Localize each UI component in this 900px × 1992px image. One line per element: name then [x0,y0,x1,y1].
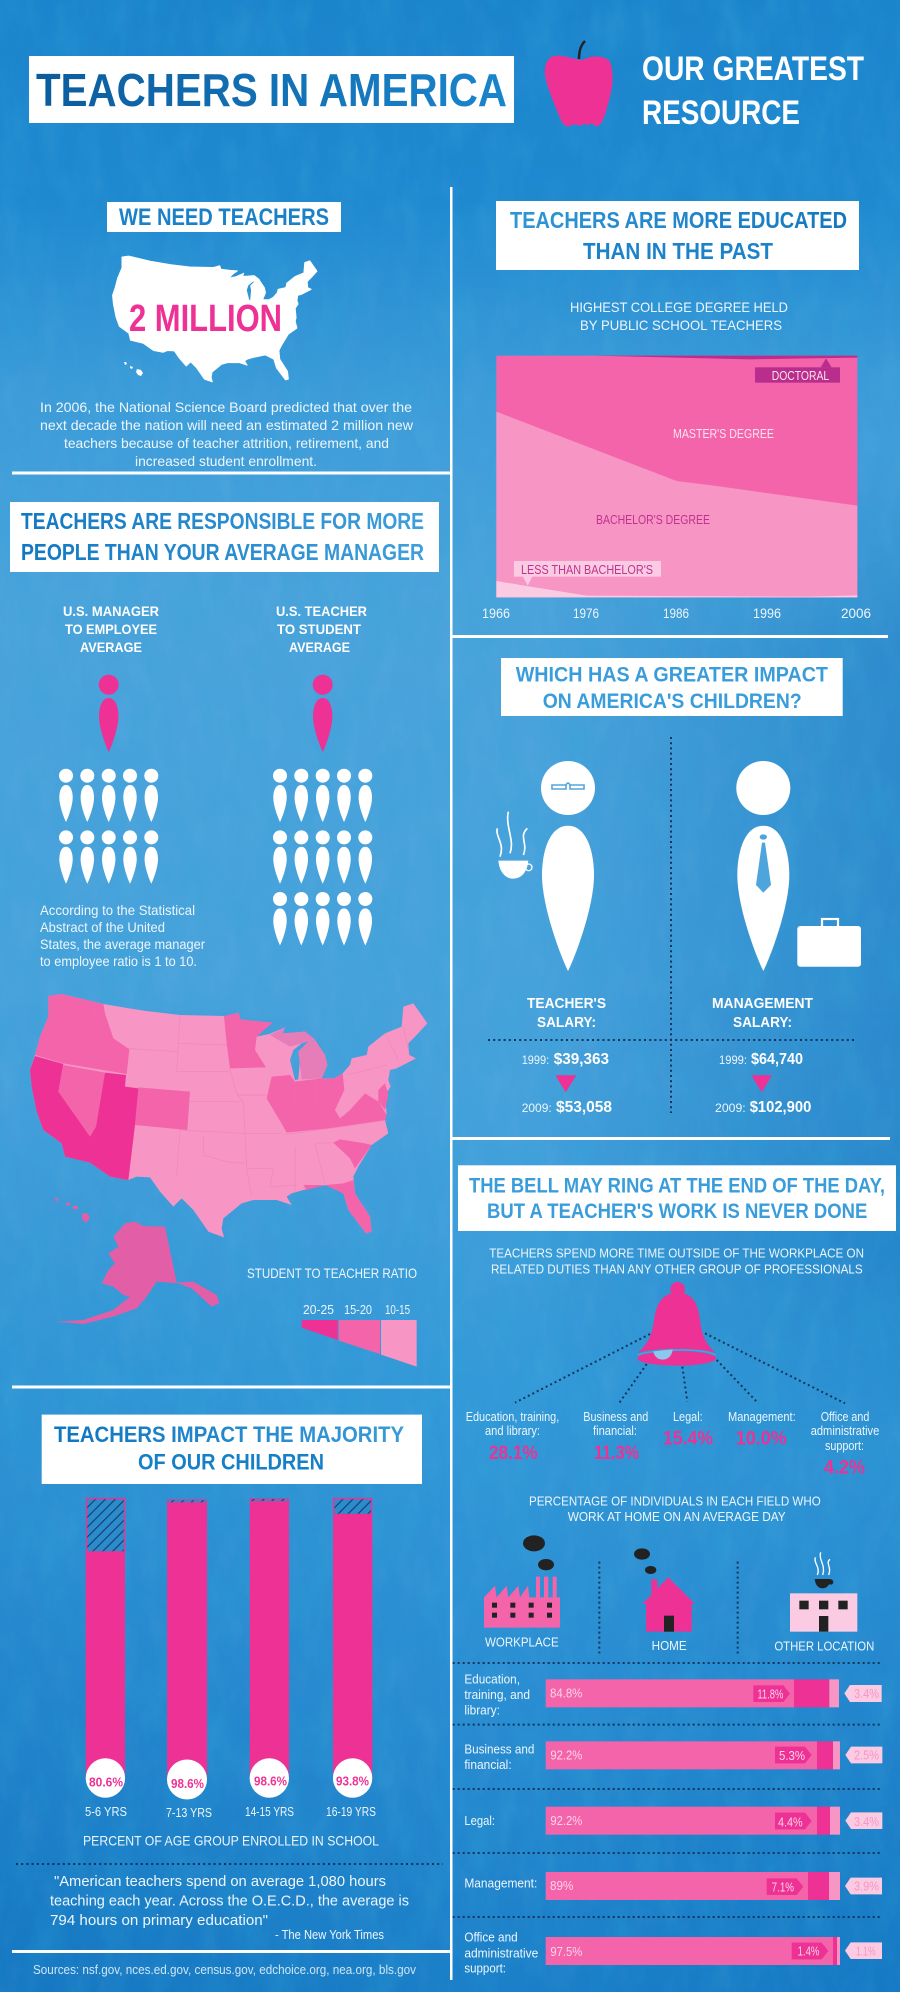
row: management [464,1872,882,1900]
text block: States, the average manager [40,936,205,952]
intro text: TEACHERS SPEND MORE TIME OUTSIDE OF THE WORKPLACE ON [489,1245,864,1260]
heading: TEACHERS IMPACT THE MAJORITY [54,1422,404,1447]
stat: office: support: [825,1438,864,1453]
row: education: library: [464,1702,500,1717]
icon: manager figure with tie [736,761,790,971]
panel: teachers impact the majority [16,1415,443,1977]
hawaii [55,1198,90,1223]
text block [40,399,414,469]
row: legal [464,1807,882,1835]
heading: OF OUR CHILDREN [138,1450,324,1474]
row: education: 3.4% [854,1686,879,1701]
icon: white US map with 2 million: 2 MILLION [129,298,282,340]
stat: management: Management: [728,1409,796,1424]
area chart: college degree: 2006 [841,605,871,621]
row: business: 2.5% [854,1748,879,1763]
subtitle [642,50,864,132]
label: manager [63,603,159,655]
label: manager: AVERAGE [80,639,142,655]
row: legal: 3.4% [854,1814,879,1829]
bar: 7-13 yrs: 7-13 YRS [166,1805,212,1820]
area chart: college degree: 1966 [482,605,510,621]
icon: teacher figure with glasses [541,761,595,971]
management salary: MANAGEMENT [712,995,813,1012]
panel: header [29,41,864,132]
row: business: 92.2% [550,1748,583,1763]
stat: management: 10.0% [736,1428,787,1449]
row: management: Management: [464,1876,537,1891]
bar: 5-6 yrs: 5-6 YRS [85,1804,127,1819]
bar: 16-19 yrs: 93.8% [336,1773,369,1788]
stat: education [466,1409,559,1464]
management salary: SALARY: [733,1014,792,1031]
map legend: STUDENT TO TEACHER RATIO [247,1265,417,1281]
row: legal: Legal: [464,1813,495,1828]
quote: 794 hours on primary education" [50,1913,268,1929]
subheading: PERCENTAGE OF INDIVIDUALS IN EACH FIELD WHO [529,1494,821,1509]
area chart: college degree: BACHELOR'S DEGREE [596,512,710,527]
locations and stacked bars [453,1535,882,1976]
map legend: 10-15 [385,1302,410,1317]
bar: 7-13 yrs: 98.6% [171,1776,204,1791]
intro text [489,1245,864,1276]
area chart: college degree: DOCTORAL [772,368,829,383]
row: legal: 4.4% [778,1815,803,1830]
teacher salary: $39,363 [554,1051,609,1068]
heading [501,658,843,716]
panel: the bell may ring [453,1165,896,1976]
map legend: 20-25 [303,1302,334,1317]
subtitle: RESOURCE [642,94,800,132]
bar: 14-15 yrs [245,1498,294,1819]
panel: we need teachers [40,202,414,469]
icon: pink manager [99,675,119,752]
icon: home: HOME [652,1638,687,1653]
stat: education: 28.1% [489,1443,538,1464]
management salary: 2009: [715,1101,746,1115]
area chart: college degree [482,356,871,621]
bar: 16-19 yrs: 16-19 YRS [326,1804,376,1819]
bar: 14-15 yrs: 14-15 YRS [245,1804,294,1819]
stat: education: and library: [485,1423,540,1438]
icons: 15 students [273,769,372,945]
text block: Abstract of the United [40,919,165,935]
stat: business: financial: [593,1423,637,1438]
stat: business [583,1409,648,1464]
row: office [464,1930,882,1976]
panel: responsible for more people [10,502,439,1367]
row: office: 1.1% [856,1943,876,1958]
stat: legal [663,1409,713,1449]
intro text: RELATED DUTIES THAN ANY OTHER GROUP OF PROFESSIONALS [491,1261,863,1276]
label: teacher: TO STUDENT [277,621,361,637]
icon: coffee cup [497,812,532,879]
text block [40,902,205,969]
heading: TEACHERS ARE RESPONSIBLE FOR MORE [21,508,424,534]
quote [50,1874,409,1942]
icon: white US map with 2 million [113,256,317,382]
bar: 5-6 yrs: 80.6% [89,1774,123,1790]
icons: 10 employees [59,769,158,884]
icon: home [634,1548,695,1653]
label: manager: U.S. MANAGER [63,603,159,619]
row: business: Business and [464,1741,534,1756]
row: management: 7.1% [772,1880,794,1895]
subheading: WORK AT HOME ON AN AVERAGE DAY [568,1509,786,1524]
row: legal: 92.2% [550,1813,583,1828]
stat: management [728,1409,796,1449]
text block: next decade the nation will need an estimated 2 million new [40,417,414,433]
heading [458,1165,896,1231]
stat: business: Business and [583,1409,648,1424]
row: office: 1.4% [798,1944,820,1959]
label: teacher: U.S. TEACHER [276,603,367,619]
heading [496,201,859,270]
label: teacher [276,603,367,655]
sources: Sources: nsf.gov, nces.ed.gov, census.gov, edchoice.org, nea.org, bls.gov [33,1962,416,1977]
teacher salary: 2009: [522,1101,552,1115]
row: office: 97.5% [550,1944,583,1959]
heading: ON AMERICA'S CHILDREN? [543,689,802,713]
quote: - The New York Times [275,1928,384,1942]
management salary [712,995,813,1116]
icon: pink teacher [313,675,333,752]
bar: 16-19 yrs [326,1498,376,1819]
row: business: financial: [464,1757,512,1772]
heading: WE NEED TEACHERS [119,204,329,231]
row: education: 84.8% [550,1686,583,1701]
map legend [247,1265,417,1367]
row: education: training, and [464,1687,530,1702]
heading [42,1415,422,1484]
text block: increased student enrollment. [135,453,317,469]
row: business: 5.3% [779,1748,805,1763]
stat: office: 4.2% [824,1457,865,1478]
alaska [57,1222,219,1324]
subheading [529,1494,821,1524]
icon: apple [545,41,613,126]
text block: In 2006, the National Science Board predicted that over the [40,399,412,415]
text block: to employee ratio is 1 to 10. [40,953,197,969]
chart caption: PERCENT OF AGE GROUP ENROLLED IN SCHOOL [83,1833,379,1849]
area chart: college degree: 1986 [663,605,689,621]
area chart: college degree: LESS THAN BACHELOR'S [521,562,653,577]
title [29,56,514,123]
bar: 7-13 yrs [166,1500,212,1820]
heading [10,502,439,572]
stat: legal: Legal: [673,1409,703,1424]
stat: office [811,1409,879,1478]
stat: education: Education, training, [466,1409,559,1424]
bar: 5-6 yrs [85,1498,127,1819]
title: TEACHERS IN AMERICA [36,64,507,116]
teacher salary [522,995,612,1116]
row: office: administrative [464,1945,538,1960]
row: education: Education, [464,1671,520,1686]
stat: office: administrative [811,1423,879,1438]
row: management: 3.9% [854,1879,879,1894]
chart subtitle [570,299,788,333]
area chart: college degree: MASTER'S DEGREE [673,426,774,441]
stat: legal: 15.4% [663,1428,713,1449]
text block: According to the Statistical [40,902,195,918]
area chart: college degree: 1996 [753,605,781,621]
dotted connectors [515,1333,845,1403]
management salary: $102,900 [750,1099,811,1116]
label: teacher: AVERAGE [289,639,350,655]
panel: which has a greater impact [488,658,861,1116]
label: manager: TO EMPLOYEE [65,621,157,637]
row: business [464,1741,882,1772]
management salary: 1999: [719,1053,747,1067]
icon: factory workplace: WORKPLACE [485,1635,559,1650]
heading: THAN IN THE PAST [583,238,773,264]
heading: PEOPLE THAN YOUR AVERAGE MANAGER [21,539,424,565]
map legend: 15-20 [344,1302,372,1317]
stat: business: 11.3% [594,1443,639,1464]
bar: 14-15 yrs: 98.6% [254,1773,287,1788]
heading: TEACHERS ARE MORE EDUCATED [510,207,847,233]
row: office: Office and [464,1930,518,1945]
teacher salary: $53,058 [556,1099,612,1116]
icon: factory workplace [484,1535,560,1650]
row: office: support: [464,1961,506,1976]
row: management: 89% [550,1878,574,1893]
teacher salary: SALARY: [537,1014,596,1031]
panel: teachers are more educated [482,201,871,621]
icon: briefcase [797,919,861,967]
icon: other location: OTHER LOCATION [774,1639,874,1654]
text block: teachers because of teacher attrition, retirement, and [64,435,389,451]
chart subtitle: BY PUBLIC SCHOOL TEACHERS [580,317,782,333]
area chart: college degree: 1976 [573,605,599,621]
chart subtitle: HIGHEST COLLEGE DEGREE HELD [570,299,788,315]
stat: office: Office and [821,1409,869,1424]
teacher salary: TEACHER'S [527,995,606,1012]
row: education [464,1671,882,1717]
icon: other location [774,1552,874,1654]
quote: teaching each year. Across the O.E.C.D., the average is [50,1894,409,1910]
management salary: $64,740 [751,1051,803,1068]
map: student to teacher ratio [30,994,427,1324]
icon: bell [637,1282,716,1366]
quote: "American teachers spend on average 1,080 hours [54,1874,386,1890]
heading: WHICH HAS A GREATER IMPACT [516,663,828,687]
row: education: 11.8% [757,1686,784,1701]
teacher salary: 1999: [522,1053,549,1067]
